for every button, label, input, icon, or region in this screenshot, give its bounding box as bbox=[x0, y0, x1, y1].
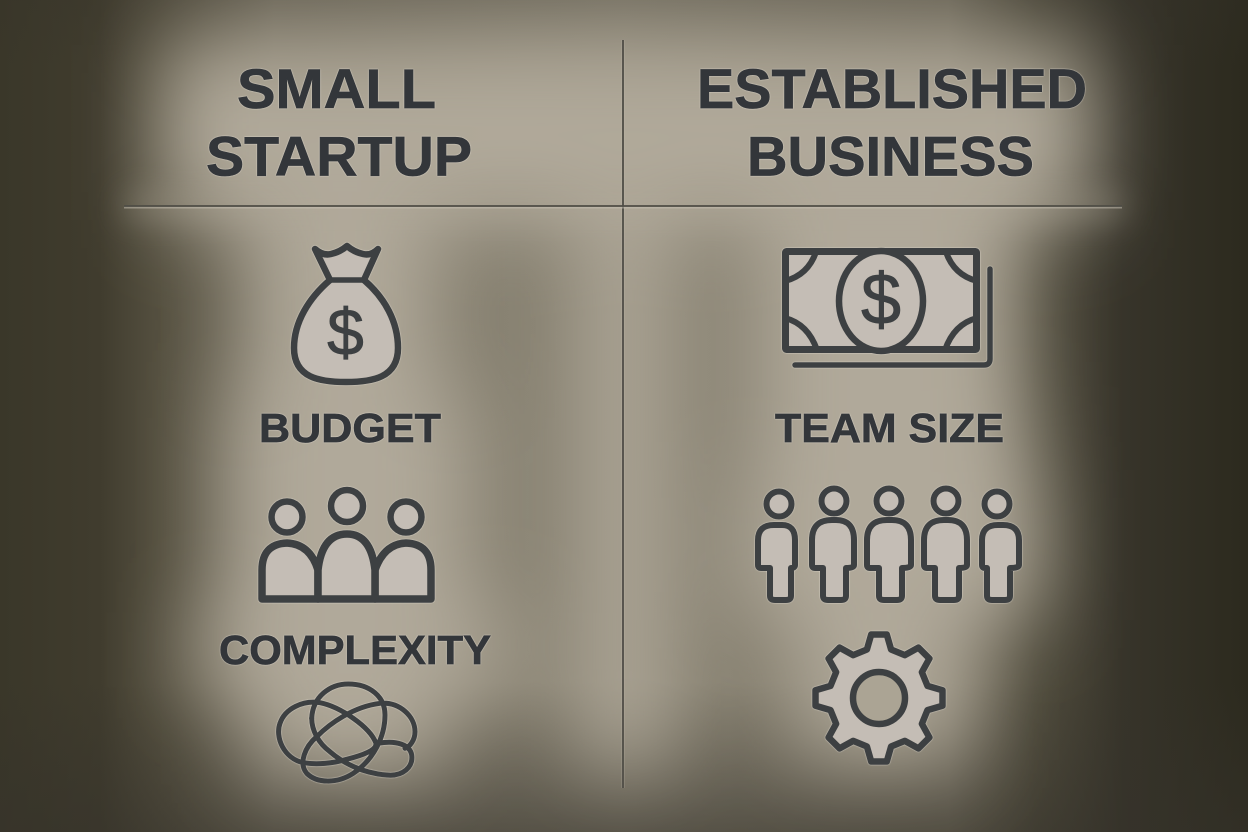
heading: small startup: SMALL bbox=[237, 57, 436, 120]
icon: banknote stack: $ bbox=[861, 260, 901, 340]
heading: established business bbox=[697, 57, 1087, 188]
heading: established business: BUSINESS bbox=[747, 124, 1034, 188]
icon: gear bbox=[816, 634, 942, 762]
label: budget: BUDGET bbox=[259, 405, 441, 451]
icon: money bag bbox=[294, 246, 398, 382]
icon: tangled knot bbox=[279, 684, 415, 781]
icon: banknote stack bbox=[785, 251, 990, 365]
icon: three people bbox=[262, 490, 431, 599]
icon: money bag: $ bbox=[327, 295, 364, 369]
heading: established business: ESTABLISHED bbox=[697, 57, 1087, 120]
icon: five people bbox=[758, 488, 1019, 600]
heading: small startup: STARTUP bbox=[206, 124, 472, 188]
heading: small startup bbox=[206, 57, 472, 188]
label: complexity: COMPLEXITY bbox=[219, 627, 491, 673]
horizontal divider bbox=[124, 206, 1122, 207]
vertical divider bbox=[622, 40, 624, 788]
label: team size: TEAM SIZE bbox=[775, 405, 1004, 451]
